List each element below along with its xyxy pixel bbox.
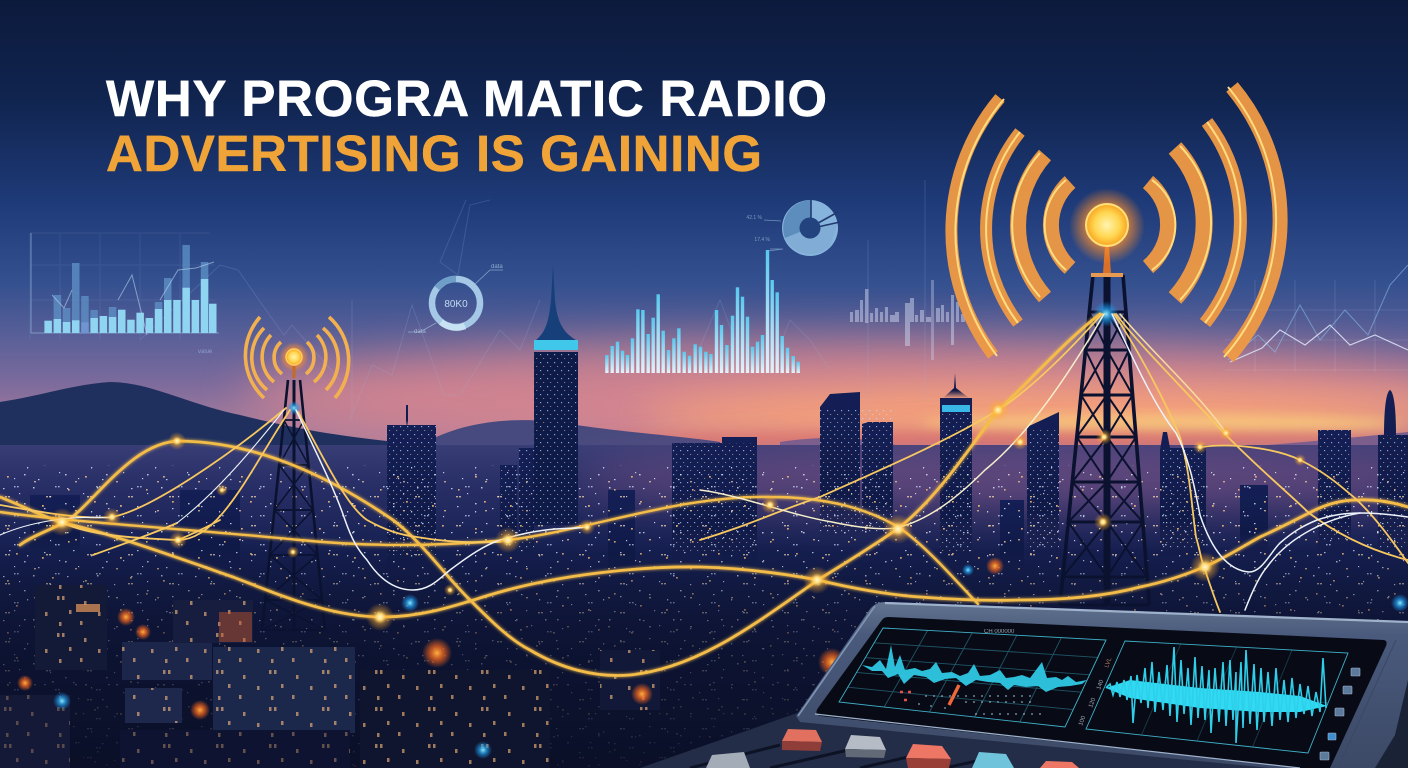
fader slots — [690, 745, 990, 768]
faint background data lines — [30, 180, 925, 420]
title — [106, 70, 827, 182]
bar chart: left: value — [198, 349, 213, 355]
small tower beacon — [279, 342, 309, 378]
scope labels: 120 — [1088, 697, 1098, 709]
secondary gold curves — [0, 314, 1408, 612]
console buttons — [706, 729, 1079, 768]
title line 1: WHY PROGRA MATIC RADIO — [106, 70, 827, 127]
tower lights — [1093, 301, 1119, 327]
pie chart: 42.1 % — [746, 215, 763, 221]
bar chart: left — [31, 233, 219, 355]
big tower beacon — [1069, 188, 1145, 264]
donut chart: data — [491, 264, 503, 270]
console deck — [640, 712, 1290, 768]
console side icons — [1320, 668, 1360, 760]
foreground blocks — [0, 585, 660, 768]
scope labels — [984, 629, 1114, 727]
building windows — [387, 407, 1408, 555]
donut chart: data — [414, 329, 426, 335]
city light scatter — [0, 465, 1408, 768]
scope markers — [900, 685, 1045, 714]
mountains — [0, 382, 1408, 480]
background: night sky gradient — [0, 0, 1408, 470]
scope labels: 140 — [1096, 679, 1106, 691]
audio mixing console — [640, 602, 1408, 768]
cyan tower cap — [942, 405, 970, 412]
small radio tower — [262, 380, 325, 630]
arc bands — [951, 87, 1280, 357]
scope labels: 100 — [1078, 715, 1088, 727]
right scope grid — [1086, 641, 1348, 753]
big broadcast signal arcs — [951, 87, 1280, 357]
donut value: 80K0 — [444, 299, 468, 310]
city base — [0, 445, 1408, 768]
skyline towers — [30, 373, 1408, 580]
bar chart: faint right — [850, 280, 965, 360]
city skyline — [0, 373, 1408, 768]
left waveform — [862, 645, 1087, 692]
scope labels: CH 000000 — [984, 629, 1015, 635]
bar chart: center — [605, 250, 800, 373]
darkening toward the foreground — [0, 540, 1408, 768]
scope labels: LVL — [1104, 656, 1114, 669]
screen — [816, 617, 1387, 768]
arc highlights — [955, 87, 1276, 357]
donut chart — [408, 264, 503, 335]
title line 2: ADVERTISING IS GAINING — [106, 125, 762, 182]
orange and blue city glows — [219, 612, 252, 642]
pie chart — [746, 198, 840, 256]
left scope grid — [839, 628, 1106, 727]
console bezel — [796, 602, 1408, 768]
line chart: right — [1225, 265, 1408, 372]
central spire building — [534, 265, 578, 525]
pie chart: 17.4 % — [754, 237, 771, 243]
network signal curves — [0, 314, 1408, 676]
big radio tower — [1060, 246, 1149, 605]
purple haze over far city — [570, 448, 1408, 508]
lattice — [1060, 275, 1149, 605]
tower platform and mast — [1091, 273, 1123, 277]
small broadcast signal arcs — [245, 317, 349, 398]
network nodes — [48, 399, 1306, 631]
main gold curves — [0, 314, 1408, 676]
right waveform — [1106, 647, 1327, 743]
right console side — [1375, 680, 1408, 768]
white curves — [0, 314, 1408, 610]
